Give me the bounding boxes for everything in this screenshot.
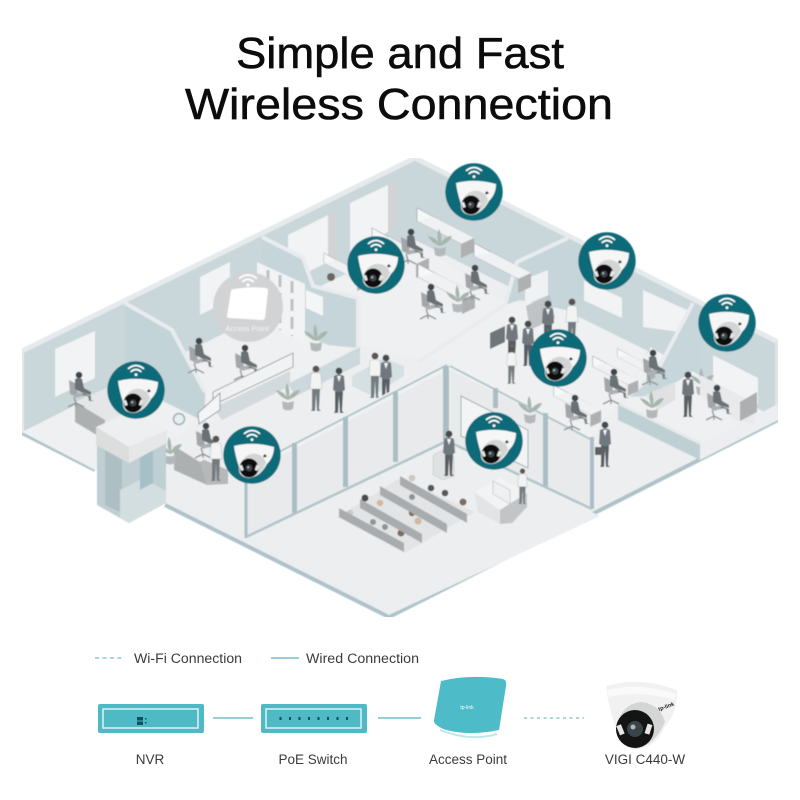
lift shaft and roof bbox=[96, 411, 167, 523]
conference floor side line bbox=[246, 441, 592, 537]
reception desk and people bbox=[158, 414, 228, 485]
clock bbox=[174, 414, 184, 424]
room 4 desks bbox=[518, 348, 668, 430]
device: NVR bbox=[98, 704, 204, 767]
seated worker hidden behind camera bbox=[327, 273, 335, 281]
outer floor edge bbox=[22, 420, 778, 617]
room floors bbox=[22, 240, 778, 470]
device: PoE switch: PoE Switch bbox=[278, 752, 348, 767]
plant: room 2 corner bbox=[304, 324, 328, 352]
camera badge: room 4 centre bbox=[529, 329, 587, 387]
wire: switch to access point bbox=[378, 717, 421, 719]
device: VIGI C440-W camera: tp-link bbox=[658, 701, 676, 713]
camera badge: room 3 bbox=[347, 236, 405, 294]
room 2 staff and shelves bbox=[188, 338, 293, 424]
device: access point bbox=[429, 677, 507, 767]
back wall windows bbox=[55, 181, 758, 405]
device: access point: Access Point bbox=[429, 752, 507, 767]
conference floor bbox=[246, 441, 600, 615]
corridor low wall bbox=[288, 347, 360, 396]
room 1 desk and manager bbox=[68, 372, 148, 440]
device: VIGI C440-W camera: VIGI C440-W bbox=[605, 752, 685, 767]
conference seating rows bbox=[337, 475, 475, 553]
floor slab bbox=[22, 238, 778, 617]
title bbox=[185, 29, 613, 129]
room 3 and room 4 partition bbox=[418, 238, 650, 362]
office floor plan bbox=[22, 158, 778, 617]
camera badge: room 5 bbox=[698, 294, 756, 352]
room 5 partition bbox=[627, 303, 701, 397]
room 3 desks and staff bbox=[324, 208, 531, 319]
camera badge: room 4 back bbox=[578, 232, 636, 290]
title: Wireless Connection bbox=[185, 80, 613, 129]
conference room back glass wall bbox=[244, 365, 449, 538]
corridor people and sofa bbox=[276, 353, 404, 413]
access point badge: Access Point bbox=[225, 324, 270, 333]
device: VIGI C440-W camera bbox=[605, 682, 685, 767]
room 1 and room 2 partition bbox=[125, 303, 205, 422]
device: access point: tp-link bbox=[460, 705, 474, 711]
device: NVR: NVR bbox=[136, 752, 164, 767]
person with briefcase bbox=[595, 422, 611, 467]
legend: Wi-Fi connection: Wi-Fi Connection bbox=[134, 651, 242, 666]
room 5 staff and desks bbox=[640, 368, 757, 425]
room 4 people bbox=[490, 295, 578, 384]
camera badge: conference room bbox=[465, 412, 523, 470]
conference room side glass wall bbox=[450, 366, 594, 509]
access point badge bbox=[213, 272, 283, 342]
room 2 and room 3 partition with bookcase bbox=[257, 237, 358, 348]
title: Simple and Fast bbox=[236, 29, 564, 78]
wireless link: access point to camera bbox=[524, 717, 584, 719]
presenter desk bbox=[474, 468, 527, 524]
camera badge: reception bbox=[223, 426, 281, 484]
plant: reception bbox=[158, 437, 182, 464]
device: PoE switch bbox=[261, 704, 367, 767]
legend: wired connection: Wired Connection bbox=[306, 651, 419, 666]
back walls bbox=[22, 158, 778, 432]
camera badge: top room bbox=[445, 163, 503, 221]
lectern and speaker bbox=[433, 431, 455, 480]
room 5 low wall bbox=[618, 403, 778, 460]
camera badge: room 1 bbox=[107, 361, 165, 419]
wire: NVR to switch bbox=[213, 717, 253, 719]
